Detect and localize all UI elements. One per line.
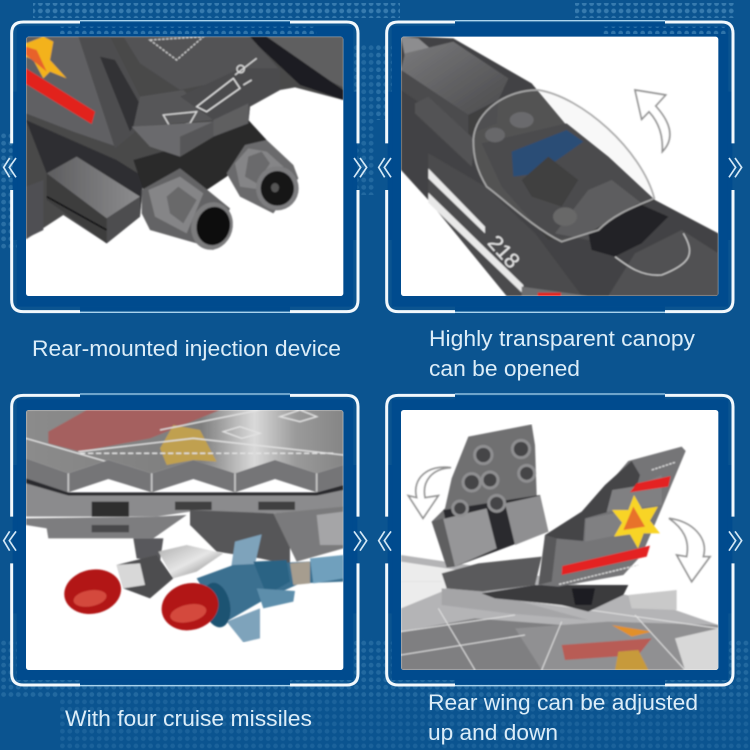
panel 2 frame band dots	[602, 27, 728, 34]
caption: rear-mounted injection device: Rear-mounted injection device	[32, 336, 341, 361]
panel 2 photo: cockpit and fuselage	[401, 37, 718, 296]
left fin (raised)	[432, 424, 548, 568]
caption: adjustable rear wing	[428, 690, 698, 745]
panel 3 frame	[4, 394, 367, 686]
open arrow	[635, 90, 670, 152]
panel 4 frame	[379, 394, 742, 686]
caption: adjustable rear wing: Rear wing can be adjusted	[428, 690, 698, 715]
panel: rear-mounted injection device	[4, 21, 367, 312]
cockpit interior	[564, 122, 652, 198]
panel: highly transparent canopy	[379, 21, 742, 312]
panel 1 frame band dots	[60, 27, 317, 34]
shadow joining engines to the body	[133, 120, 267, 190]
caption: highly transparent canopy: Highly transparent canopy	[429, 326, 695, 351]
deck	[401, 554, 718, 632]
engine nozzle right	[227, 140, 299, 213]
panel 1 white photo area	[26, 37, 343, 296]
fuselage white stripes	[428, 168, 485, 233]
caption: highly transparent canopy	[429, 326, 695, 381]
panel 3 white photo area	[26, 410, 343, 670]
panel 1 photo: engines and tail of the jet	[26, 37, 343, 255]
panel 4 photo: tail fins on deck	[401, 424, 718, 670]
engine nozzle left	[142, 168, 238, 255]
panel 2 white photo area	[401, 37, 718, 296]
panel 2 frame	[379, 21, 742, 312]
panel: adjustable rear wing	[379, 394, 742, 686]
caption: four cruise missiles: With four cruise missiles	[65, 706, 312, 731]
fuselage number: 218	[483, 231, 525, 273]
down arrow left	[408, 467, 451, 518]
caption: highly transparent canopy: can be opened	[429, 356, 580, 381]
panel 3 photo: missiles under deck	[26, 410, 343, 642]
right fin (lowered)	[538, 447, 686, 605]
missile rear	[60, 545, 223, 619]
panel 4 white photo area	[401, 410, 718, 670]
transparent canopy	[473, 90, 654, 242]
down arrow right	[669, 518, 710, 582]
fin star emblem	[612, 495, 660, 548]
caption: adjustable rear wing: up and down	[428, 720, 558, 745]
panel: four cruise missiles	[4, 394, 367, 686]
panel 1 frame	[4, 21, 367, 312]
missile front	[157, 534, 343, 642]
